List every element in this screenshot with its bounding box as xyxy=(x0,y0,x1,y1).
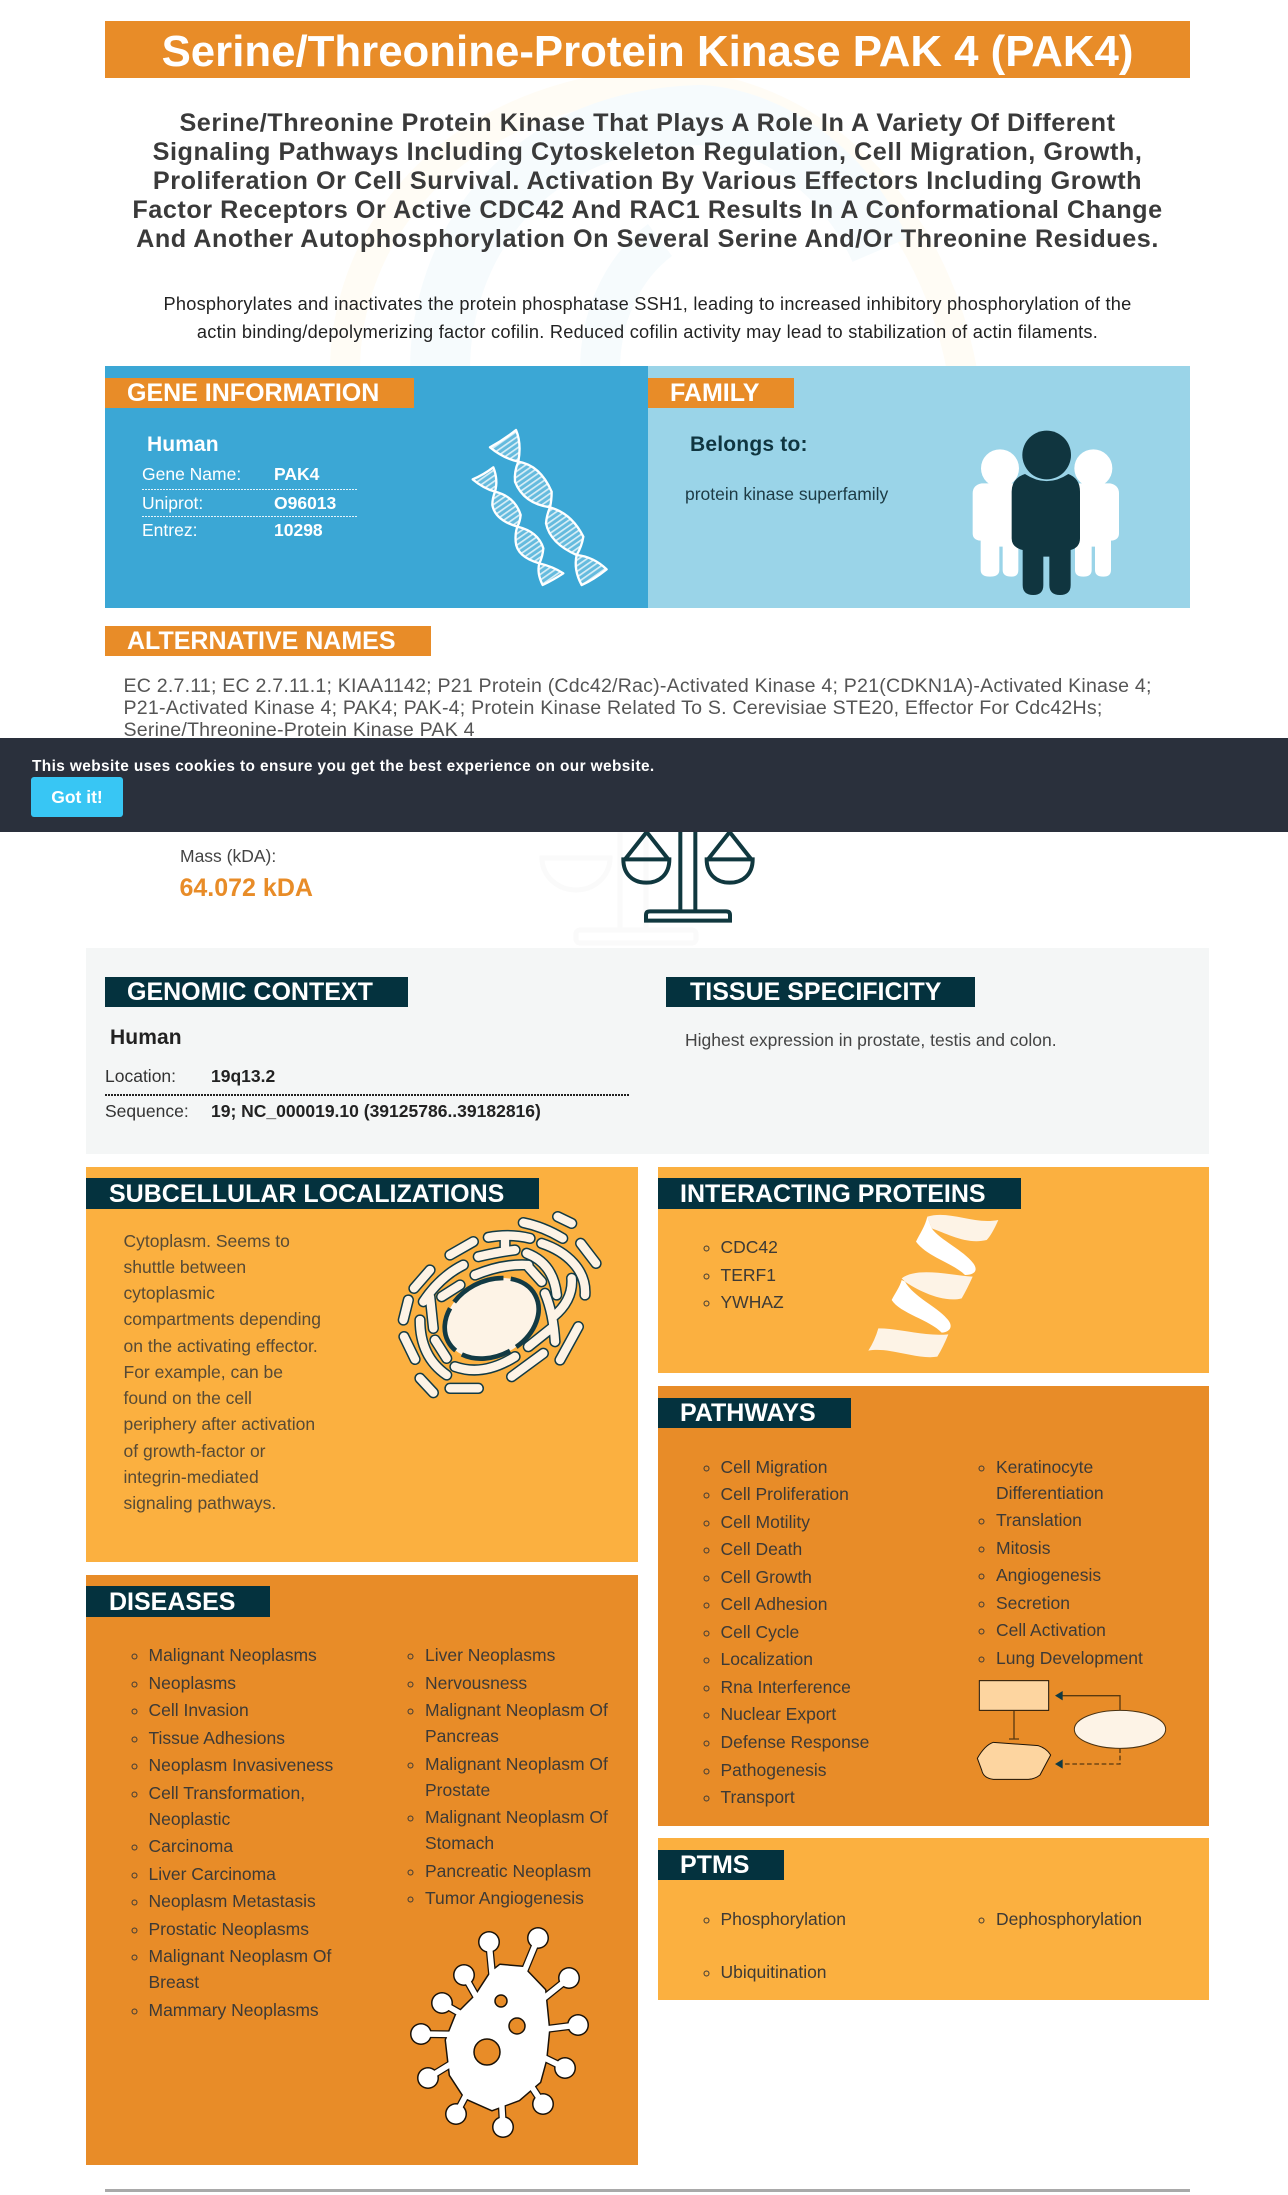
heading: ptms xyxy=(658,1850,784,1880)
heading: genomic context: GENOMIC CONTEXT xyxy=(127,978,373,1006)
pathways list column 1: Rna Interference xyxy=(720,1677,851,1697)
uniprot row: Uniprot: xyxy=(142,493,203,513)
localization text: compartments depending xyxy=(124,1309,321,1329)
title: Serine/Threonine-Protein Kinase PAK 4 (PAK4) xyxy=(162,27,1133,76)
sequence row: 19; NC_000019.10 (39125786..39182816) xyxy=(211,1101,541,1121)
interacting proteins list: TERF1 xyxy=(720,1265,776,1285)
pathways list column 1: Cell Adhesion xyxy=(720,1594,828,1614)
pathways list column 2 xyxy=(978,1456,1143,1668)
heading: ptms: PTMS xyxy=(680,1851,749,1879)
cookie message: This website uses cookies to ensure you get the best experience on our website. xyxy=(32,758,655,775)
heading: diseases: DISEASES xyxy=(109,1588,235,1616)
panel: genomic context and tissue specificity: 19q13.2 xyxy=(211,1066,275,1086)
location row: Location: xyxy=(105,1066,176,1086)
diseases list column 1: Malignant Neoplasms xyxy=(148,1645,317,1665)
interacting proteins list xyxy=(704,1237,784,1312)
belongs to label: Belongs to: xyxy=(690,432,808,456)
heading: tissue specificity: TISSUE SPECIFICITY xyxy=(690,978,941,1006)
mass value: 64.072 kDA xyxy=(180,874,313,902)
pathways list column 2: Lung Development xyxy=(996,1648,1143,1668)
heading: diseases xyxy=(86,1586,270,1617)
tissue specificity text: Highest expression in prostate, testis and colon. xyxy=(685,1030,1057,1050)
background watermark xyxy=(330,78,976,366)
diseases list column 2: Stomach xyxy=(425,1833,494,1853)
panel: family xyxy=(648,366,1190,608)
localization text: cytoplasmic xyxy=(124,1283,215,1303)
localization text: integrin-mediated xyxy=(124,1467,259,1487)
diseases list column 2: Malignant Neoplasm Of xyxy=(425,1700,608,1720)
pathways list column 2: Differentiation xyxy=(996,1482,1104,1502)
diseases list column 2: Malignant Neoplasm Of xyxy=(425,1754,608,1774)
panel: pathways xyxy=(658,1386,1209,1826)
diseases list column 1: Neoplasm Invasiveness xyxy=(148,1755,333,1775)
panel: genomic context and tissue specificity xyxy=(86,948,1209,1154)
icon: pathway diagram xyxy=(976,1680,1166,1780)
entrez row xyxy=(142,520,323,540)
alternative names text xyxy=(124,675,1152,741)
heading: pathways xyxy=(658,1398,851,1428)
pathways list column 1: Cell Motility xyxy=(720,1512,810,1532)
localization text: found on the cell xyxy=(124,1388,252,1408)
diseases list column 1: Prostatic Neoplasms xyxy=(148,1919,309,1939)
description text: actin binding/depolymerizing factor cofilin. Reduced cofilin activity may lead to stabilization of actin filaments. xyxy=(197,322,1098,342)
diseases list column 2 xyxy=(408,1645,608,1908)
ptm item: ubiquitination: Ubiquitination xyxy=(720,1962,827,1982)
description text xyxy=(163,294,1132,342)
location row xyxy=(105,1066,275,1086)
diseases list column 2: Liver Neoplasms xyxy=(425,1645,555,1665)
panel: gene information xyxy=(105,366,648,608)
description text: Phosphorylates and inactivates the protein phosphatase SSH1, leading to increased inhibitory phosphorylation of the xyxy=(163,294,1132,314)
diseases list column 1: Tissue Adhesions xyxy=(148,1728,285,1748)
entrez row: Entrez: xyxy=(142,520,197,540)
pathways list column 1: Defense Response xyxy=(720,1732,869,1752)
localization text xyxy=(124,1230,321,1513)
button: got it: Got it! xyxy=(51,787,103,807)
icon: protein ribbon xyxy=(868,1214,998,1358)
pathways list column 2: Mitosis xyxy=(996,1538,1050,1558)
icon: dna xyxy=(472,428,608,586)
summary heading: Factor Receptors Or Active CDC42 And RAC1 Results In A Conformational Change xyxy=(132,196,1163,224)
species label: Human xyxy=(147,432,219,456)
family value: protein kinase superfamily xyxy=(685,484,888,504)
panel: diseases xyxy=(86,1575,638,2165)
diseases list column 1: Carcinoma xyxy=(148,1836,233,1856)
icon: scales xyxy=(621,832,755,923)
icon: people xyxy=(972,430,1119,595)
icon: virus xyxy=(410,1927,589,2138)
panel: interacting proteins xyxy=(658,1167,1209,1373)
localization text: periphery after activation xyxy=(124,1414,315,1434)
heading: pathways: PATHWAYS xyxy=(680,1399,816,1427)
pathways list column 1: Transport xyxy=(720,1787,795,1807)
diseases list column 2: Pancreas xyxy=(425,1726,499,1746)
button: got it xyxy=(31,777,123,817)
mass label: Mass (kDA): xyxy=(180,846,276,866)
diseases list column 1 xyxy=(132,1645,333,2020)
heading: family: FAMILY xyxy=(670,378,759,406)
diseases list column 1: Cell Invasion xyxy=(148,1700,249,1720)
alternative names text: P21-Activated Kinase 4; PAK4; PAK-4; Protein Kinase Related To S. Cerevisiae STE20, Effector For Cdc42Hs; xyxy=(124,697,1103,719)
heading: gene information: GENE INFORMATION xyxy=(127,378,379,406)
pathways list column 1: Nuclear Export xyxy=(720,1704,836,1724)
pathways list column 1: Pathogenesis xyxy=(720,1760,827,1780)
diseases list column 2: Prostate xyxy=(425,1780,490,1800)
localization text: Cytoplasm. Seems to xyxy=(124,1230,290,1250)
gene name row: Gene Name: xyxy=(142,464,241,484)
gene name row xyxy=(142,464,320,484)
ptm item: dephosphorylation: Dephosphorylation xyxy=(996,1909,1142,1929)
localization text: on the activating effector. xyxy=(124,1336,318,1356)
pathways list column 2: Angiogenesis xyxy=(996,1565,1101,1585)
summary heading: Serine/Threonine Protein Kinase That Plays A Role In A Variety Of Different xyxy=(179,109,1116,137)
heading: interacting proteins: INTERACTING PROTEINS xyxy=(680,1180,986,1208)
pathways list column 2: Translation xyxy=(996,1510,1082,1530)
diseases list column 2: Malignant Neoplasm Of xyxy=(425,1807,608,1827)
ptm item: phosphorylation: Phosphorylation xyxy=(720,1909,846,1929)
uniprot row: O96013 xyxy=(274,493,336,513)
summary heading: Signaling Pathways Including Cytoskeleton Regulation, Cell Migration, Growth, xyxy=(153,138,1142,166)
localization text: shuttle between xyxy=(124,1257,246,1277)
pathways list column 1: Cell Migration xyxy=(720,1456,827,1476)
diseases list column 1: Breast xyxy=(148,1972,199,1992)
diseases list column 2: Pancreatic Neoplasm xyxy=(425,1861,591,1881)
species label: Human xyxy=(110,1026,182,1049)
diseases list column 1: Neoplasm Metastasis xyxy=(148,1891,316,1911)
pathways list column 1 xyxy=(704,1456,869,1807)
localization text: For example, can be xyxy=(124,1362,283,1382)
diseases list column 1: Neoplasms xyxy=(148,1673,236,1693)
heading: alternative names: ALTERNATIVE NAMES xyxy=(127,627,396,655)
diseases list column 1: Cell Transformation, xyxy=(148,1783,305,1803)
pathways list column 2: Secretion xyxy=(996,1593,1070,1613)
icon: cell organelle xyxy=(398,1211,602,1398)
entrez row: 10298 xyxy=(274,520,323,540)
panel: ptms xyxy=(658,1838,1209,2000)
diseases list column 1: Neoplastic xyxy=(148,1809,230,1829)
pathways list column 1: Cell Growth xyxy=(720,1567,812,1587)
panel: subcellular localizations xyxy=(86,1167,638,1562)
pathways list column 2: Keratinocyte xyxy=(996,1456,1093,1476)
pathways list column 2: Cell Activation xyxy=(996,1620,1106,1640)
localization text: signaling pathways. xyxy=(124,1493,276,1513)
diseases list column 2: Nervousness xyxy=(425,1673,527,1693)
pathways list column 1: Localization xyxy=(720,1649,813,1669)
heading: family xyxy=(648,378,794,408)
diseases list column 1: Malignant Neoplasm Of xyxy=(148,1946,331,1966)
alternative names text: EC 2.7.11; EC 2.7.11.1; KIAA1142; P21 Protein (Cdc42/Rac)-Activated Kinase 4; P21(CDKN1A)-Activated Kinase 4; xyxy=(124,675,1152,697)
localization text: of growth-factor or xyxy=(124,1440,266,1460)
pathways list column 1: Cell Death xyxy=(720,1539,802,1559)
uniprot row xyxy=(142,493,336,513)
pathways list column 1: Cell Proliferation xyxy=(720,1484,849,1504)
diseases list column 1: Mammary Neoplasms xyxy=(148,2000,319,2020)
summary heading xyxy=(132,109,1163,253)
heading: subcellular localizations: SUBCELLULAR LOCALIZATIONS xyxy=(109,1180,504,1208)
sequence row: Sequence: xyxy=(105,1101,189,1121)
pathways list column 1: Cell Cycle xyxy=(720,1622,799,1642)
summary heading: Proliferation Or Cell Survival. Activation By Various Effectors Including Growth xyxy=(153,167,1142,195)
alternative names text: Serine/Threonine-Protein Kinase PAK 4 xyxy=(124,719,475,741)
diseases list column 2: Tumor Angiogenesis xyxy=(425,1888,584,1908)
diseases list column 1: Liver Carcinoma xyxy=(148,1864,276,1884)
interacting proteins list: YWHAZ xyxy=(720,1292,784,1312)
interacting proteins list: CDC42 xyxy=(720,1237,778,1257)
gene name row: PAK4 xyxy=(274,464,319,484)
summary heading: And Another Autophosphorylation On Several Serine And/Or Threonine Residues. xyxy=(136,225,1159,253)
cookie banner xyxy=(0,738,1288,832)
